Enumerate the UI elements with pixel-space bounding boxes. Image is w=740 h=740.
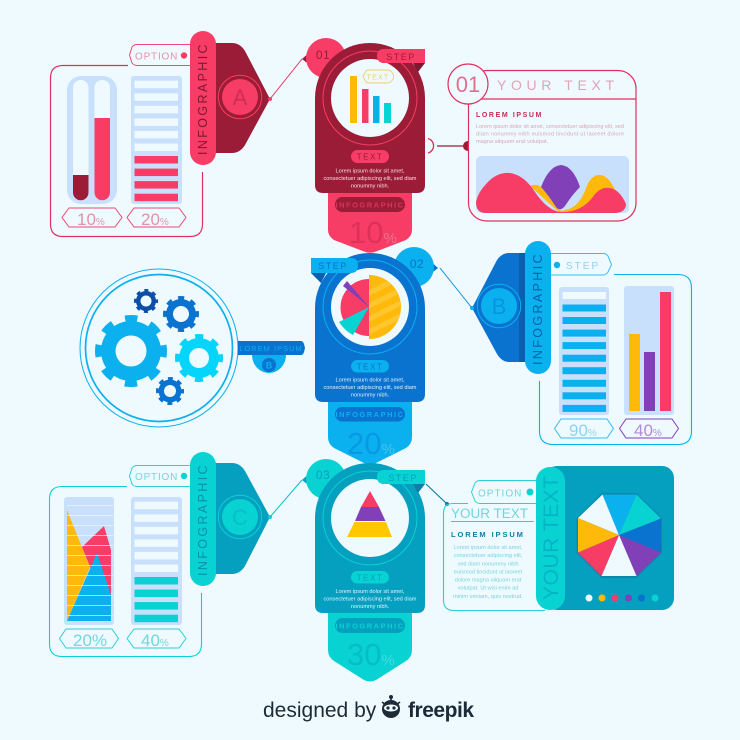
tab: 30%: 30% (347, 637, 395, 672)
tab: 30%: INFOGRAPHIC (336, 622, 404, 630)
tube fills (73, 175, 88, 200)
pill: infographic A (190, 31, 216, 165)
gears label: B (266, 360, 273, 370)
badge 03: 03 (316, 468, 330, 482)
connector A to 01 (270, 59, 302, 99)
panel: your text 01 (448, 64, 636, 221)
label 20%: 20% (141, 210, 169, 229)
octagon chart (576, 493, 662, 578)
badge 02: 02 (410, 257, 424, 271)
card: step 01 (302, 38, 425, 193)
connector 01 to panel (428, 138, 468, 153)
shield A: A (233, 85, 248, 110)
gears circle (80, 269, 238, 427)
bar chart 01 (350, 76, 391, 123)
stacked rows (131, 76, 182, 204)
step tag 02: STEP (318, 261, 348, 271)
connector 03 to text box (426, 484, 449, 506)
panel: your text 03 (444, 504, 545, 610)
label 20% C (60, 629, 118, 650)
connector 02 to B (440, 268, 472, 308)
panel C: teal charts (50, 486, 202, 656)
gear medium (165, 298, 197, 330)
panel: your text 03: Lorem ipsum dolor sit amet, (453, 545, 523, 551)
text pill 01 (351, 150, 389, 163)
shield C (214, 463, 272, 574)
body text 01: nonummy nibh. (351, 184, 390, 190)
text pill 02 (351, 360, 389, 372)
body text 02: consectetuer adipiscing elit, sed diam (324, 385, 417, 391)
tab: 10%: 10% (349, 215, 397, 250)
panel: your text 01: YOUR TEXT (497, 77, 614, 93)
panel: your text 03: sed diam nonummy nibh (458, 562, 518, 568)
step tag B (548, 254, 612, 275)
pyramid icon (347, 491, 392, 537)
mini text tag: TEXT (367, 74, 389, 82)
step tag 03: STEP (388, 473, 418, 483)
panel: your text 01: Lorem ipsum dolor sit amet, consectetuer adipiscing elit, sed (476, 124, 624, 130)
body text 03: consectetuer adipiscing elit, sed diam (324, 596, 417, 602)
shield B (470, 253, 528, 362)
body text 02: Lorem ipsum dolor sit amet, (335, 378, 405, 384)
step tag B: STEP (566, 261, 600, 272)
panel B: blue bar charts (540, 274, 692, 444)
pill: infographic C (190, 452, 216, 586)
label 40% B: 40% (634, 421, 662, 440)
panel: your text 01: magna aliquam erat volutpat. (476, 139, 549, 145)
body text 01: consectetuer adipiscing elit, sed diam (324, 176, 417, 182)
stacked rows C (131, 497, 182, 625)
shield C: C (232, 505, 248, 530)
step tag 03 (377, 470, 425, 493)
shield B: B (492, 294, 506, 319)
body text 03: nonummy nibh. (351, 604, 390, 610)
label 90%: 90% (569, 421, 597, 440)
label 90% (554, 419, 614, 440)
option tag 03: OPTION (478, 488, 522, 500)
footer credit: designed by (263, 699, 377, 722)
pill: your text (536, 467, 565, 610)
pill: infographic A: INFOGRAPHIC (196, 42, 210, 155)
panel: your text 01: diam nonummy nibh euismod tincidunt ut laoreet dolore (476, 132, 624, 138)
mini text tag (363, 70, 394, 83)
badge 02 (394, 247, 438, 287)
footer credit: freepik (408, 699, 474, 722)
panel: your text 03: LOREM IPSUM (451, 530, 525, 539)
footer credit (263, 695, 474, 722)
tab: 10% (328, 190, 412, 253)
option tag 03 (472, 480, 540, 504)
panel A: red bar charts (50, 66, 202, 236)
label 10%: 10% (77, 210, 105, 229)
badge 01 (302, 38, 346, 78)
tab: 20% (328, 398, 412, 464)
tab: 10%: INFOGRAPHIC (336, 200, 404, 210)
pill: your text: YOUR TEXT (540, 476, 563, 600)
label 10% (62, 208, 122, 229)
step tag 01 (377, 49, 425, 72)
connector C to 03 (270, 480, 302, 517)
text pill 01: TEXT (357, 152, 383, 162)
label 20% (127, 208, 186, 229)
panel: your text 01: 01 (456, 72, 480, 97)
pie chart 02 (339, 275, 401, 339)
label 20% C: 20% (73, 631, 107, 650)
step tag 02 (311, 258, 358, 283)
column chart B (624, 286, 674, 415)
icon: freepik logo (382, 695, 400, 718)
panel: your text 01: LOREM IPSUM (476, 112, 543, 119)
gears label (238, 341, 305, 373)
body text 03: Lorem ipsum dolor sit amet, (335, 589, 405, 595)
shield A (214, 43, 272, 153)
tab: 30% (328, 610, 412, 682)
badge 03 (302, 459, 346, 499)
label 40% C: 40% (141, 631, 169, 650)
option tag C: OPTION (135, 472, 178, 483)
body text 02: nonummy nibh. (351, 392, 390, 398)
gear small blue (158, 378, 182, 404)
step tag 01: STEP (386, 52, 416, 62)
panel: your text 03: consectetuer adipiscing elit, (454, 553, 523, 559)
card: step 03 (302, 459, 425, 613)
area chart (476, 156, 629, 213)
gear small dark (136, 290, 156, 312)
pill: infographic B (525, 241, 551, 374)
text pill 02: TEXT (357, 362, 383, 372)
label 40% C (127, 629, 186, 650)
gear cyan (178, 336, 220, 380)
pill: infographic B: INFOGRAPHIC (531, 252, 545, 365)
option tag A: OPTION (135, 52, 178, 62)
pill: infographic C: INFOGRAPHIC (196, 463, 210, 576)
option tag C (130, 466, 195, 486)
panel: octagon pie (545, 466, 674, 610)
panel: your text 03: minim veniam, quis nostrud. (453, 594, 523, 600)
text pill 03: TEXT (357, 574, 383, 582)
text pill 03 (351, 571, 389, 584)
gears label: LOREM IPSUM (239, 344, 303, 353)
option tag A (130, 44, 195, 66)
card: step 02 (311, 247, 438, 402)
label 40% B (620, 419, 678, 440)
panel: your text 03: euismod tincidunt ut laoreet (454, 570, 523, 576)
gear large (99, 319, 163, 383)
panel: your text 03: volutpat. Ut wisi enim ad (458, 586, 518, 592)
tab: 20%: INFOGRAPHIC (336, 410, 404, 419)
panel: your text 03: YOUR TEXT (451, 506, 528, 521)
body text 01: Lorem ipsum dolor sit amet, (335, 168, 405, 174)
legend dots (586, 594, 658, 602)
area chart C (64, 497, 114, 625)
panel: your text 03: dolore magna aliquam erat (455, 578, 522, 584)
badge 01: 01 (316, 48, 330, 62)
tab: 20%: 20% (347, 426, 395, 461)
